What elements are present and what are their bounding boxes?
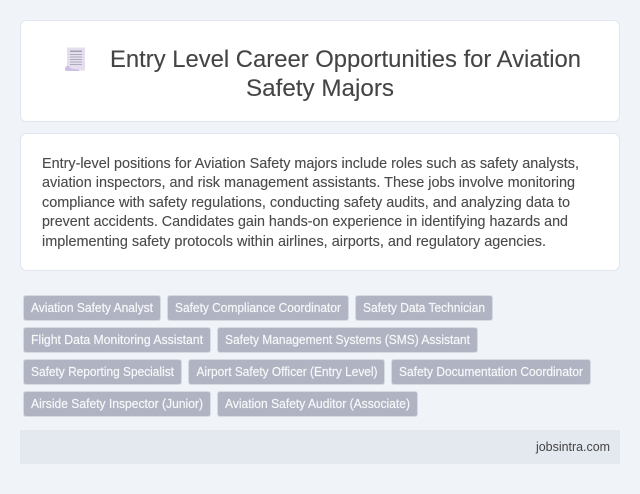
tag: Safety Reporting Specialist: Safety Reporting Specialist bbox=[31, 365, 174, 379]
tag: Aviation Safety Analyst bbox=[24, 296, 160, 320]
tag: Airport Safety Officer (Entry Level) bbox=[188, 360, 384, 384]
title: Safety Majors bbox=[246, 75, 394, 102]
tag: Safety Data Technician: Safety Data Technician bbox=[363, 301, 485, 315]
tag: Safety Management Systems (SMS) Assistant bbox=[218, 328, 478, 352]
tag: Flight Data Monitoring Assistant: Flight Data Monitoring Assistant bbox=[31, 333, 204, 347]
tag list bbox=[24, 296, 590, 416]
tag: Safety Documentation Coordinator bbox=[392, 360, 590, 384]
description text: Entry-level positions for Aviation Safety majors include roles such as safety analysts, bbox=[42, 156, 579, 172]
tag: Safety Data Technician bbox=[356, 296, 492, 320]
tag: Safety Reporting Specialist bbox=[24, 360, 182, 384]
description text: implementing safety protocols within airlines, airports, and regulatory agencies. bbox=[42, 234, 546, 250]
icon: document scroll bbox=[65, 48, 85, 71]
description text: aviation inspectors, and risk management assistants. These jobs involve monitoring bbox=[42, 175, 575, 191]
tag: Safety Documentation Coordinator: Safety Documentation Coordinator bbox=[399, 365, 583, 379]
panel: title header bbox=[20, 20, 620, 122]
panel: description bbox=[20, 134, 620, 270]
tag: Aviation Safety Auditor (Associate) bbox=[218, 392, 418, 416]
tag: Safety Compliance Coordinator bbox=[168, 296, 348, 320]
tag: Flight Data Monitoring Assistant bbox=[24, 328, 210, 352]
tag: Airside Safety Inspector (Junior) bbox=[24, 392, 210, 416]
description text bbox=[42, 156, 579, 250]
tag: Safety Management Systems (SMS) Assistant: Safety Management Systems (SMS) Assistant bbox=[225, 333, 471, 347]
description text: prevent accidents. Candidates gain hands-on experience in identifying hazards and bbox=[42, 214, 568, 230]
footer source text: jobsintra.com bbox=[535, 440, 610, 454]
title bbox=[110, 46, 581, 102]
tag: Safety Compliance Coordinator: Safety Compliance Coordinator bbox=[175, 301, 341, 315]
tag: Aviation Safety Analyst: Aviation Safety Analyst bbox=[31, 301, 153, 315]
tag: Airport Safety Officer (Entry Level): Airport Safety Officer (Entry Level) bbox=[196, 365, 378, 379]
footer bar bbox=[20, 430, 620, 464]
title: Entry Level Career Opportunities for Aviation bbox=[110, 46, 581, 73]
tag: Airside Safety Inspector (Junior): Airside Safety Inspector (Junior) bbox=[31, 397, 203, 411]
tag: Aviation Safety Auditor (Associate): Aviation Safety Auditor (Associate) bbox=[225, 397, 410, 411]
description text: compliance with safety regulations, conducting safety audits, and analyzing data to bbox=[42, 195, 570, 211]
